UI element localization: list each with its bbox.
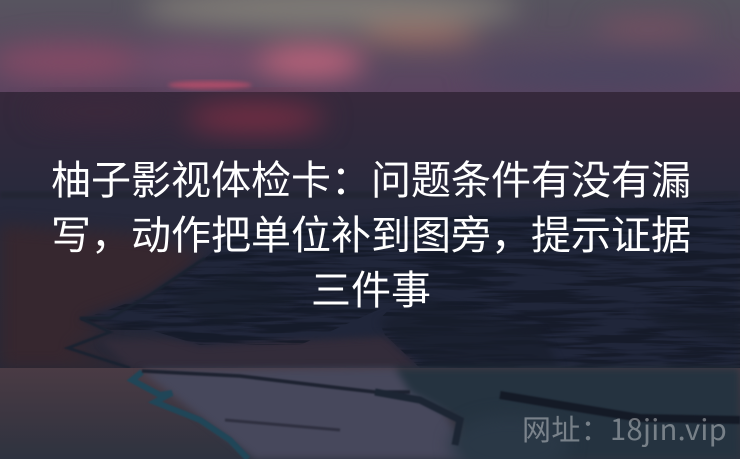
- lower photo strip: [0, 368, 740, 459]
- wet sand: [100, 335, 430, 368]
- sky: [0, 0, 740, 92]
- dark overlay band: sea and beach: [0, 92, 740, 368]
- watermark: 网址：18jin.vip: [522, 407, 727, 449]
- sand: [0, 225, 205, 368]
- title: 柚子影视体检卡：问题条件有没有漏写，动作把单位补到图旁，提示证据三件事: [51, 148, 691, 316]
- dark waves: [170, 270, 740, 368]
- dark water: [80, 200, 740, 368]
- shoreline: [68, 258, 205, 368]
